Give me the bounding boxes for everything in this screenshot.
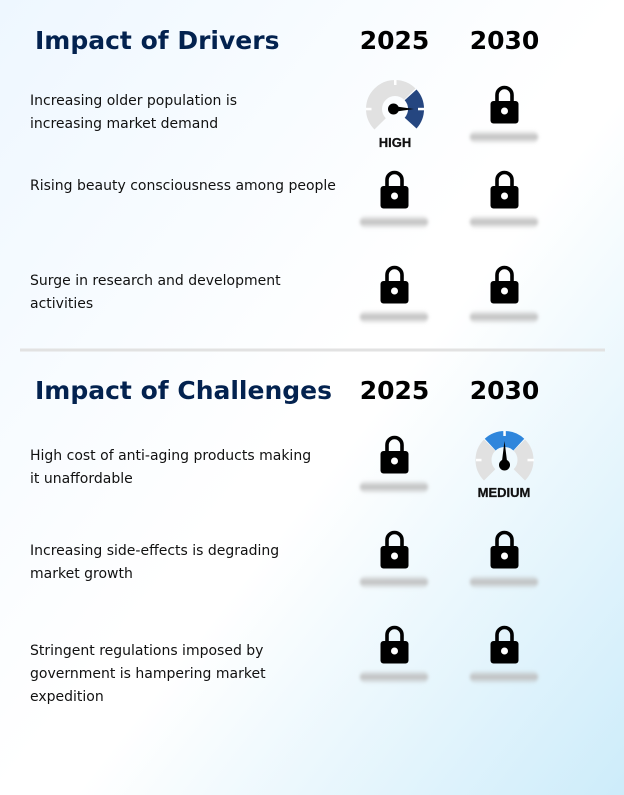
icon: lock 2030 — [490, 532, 518, 568]
icon: lock 2030 — [490, 268, 518, 304]
icon: lock 2025 — [380, 628, 408, 664]
panel: impact of challenges — [30, 376, 539, 705]
gauge: medium: MEDIUM — [478, 485, 530, 500]
column header: 2025: 2025 — [360, 26, 429, 55]
blurred rating — [360, 670, 428, 684]
gauge: medium — [476, 431, 534, 500]
blurred rating — [360, 310, 428, 324]
icon: lock 2030 — [490, 172, 518, 208]
text: challenge 3: expedition — [30, 689, 104, 705]
text: driver 2: Rising beauty consciousness among people — [30, 178, 336, 194]
text: driver 1: Increasing older population is — [30, 93, 237, 109]
blurred rating — [470, 575, 538, 589]
icon: lock 2025 — [380, 438, 408, 474]
gauge: high: HIGH — [379, 135, 411, 150]
blurred rating — [470, 130, 538, 144]
text: driver 3: activities — [30, 296, 93, 312]
text: challenge 2: Increasing side-effects is degrading — [30, 543, 279, 559]
icon: lock 2030 — [490, 628, 518, 664]
text: driver 1: increasing market demand — [30, 116, 218, 132]
blurred rating — [360, 480, 428, 494]
blurred rating — [360, 215, 428, 229]
icon: lock 2025 — [380, 268, 408, 304]
column header: 2030: 2030 — [470, 376, 539, 405]
heading: impact of drivers: Impact of Drivers — [35, 26, 279, 55]
blurred rating — [470, 670, 538, 684]
blurred rating — [470, 310, 538, 324]
text: challenge 3: Stringent regulations imposed by — [30, 643, 263, 659]
text: challenge 3: government is hampering market — [30, 666, 266, 682]
column header: 2030: 2030 — [470, 26, 539, 55]
text: challenge 2: market growth — [30, 566, 133, 582]
gauge: high — [366, 80, 425, 150]
text: challenge 1: it unaffordable — [30, 471, 133, 487]
icon: lock 2025 — [380, 172, 408, 208]
blurred rating — [470, 215, 538, 229]
column header: 2025: 2025 — [360, 376, 429, 405]
blurred rating — [360, 575, 428, 589]
text: driver 3: Surge in research and development — [30, 273, 281, 289]
text: challenge 1: High cost of anti-aging products making — [30, 448, 311, 464]
icon: lock 2030 — [490, 88, 518, 124]
heading: impact of challenges: Impact of Challenges — [35, 376, 332, 405]
icon: lock 2025 — [380, 532, 408, 568]
panel: impact of drivers — [30, 26, 539, 324]
